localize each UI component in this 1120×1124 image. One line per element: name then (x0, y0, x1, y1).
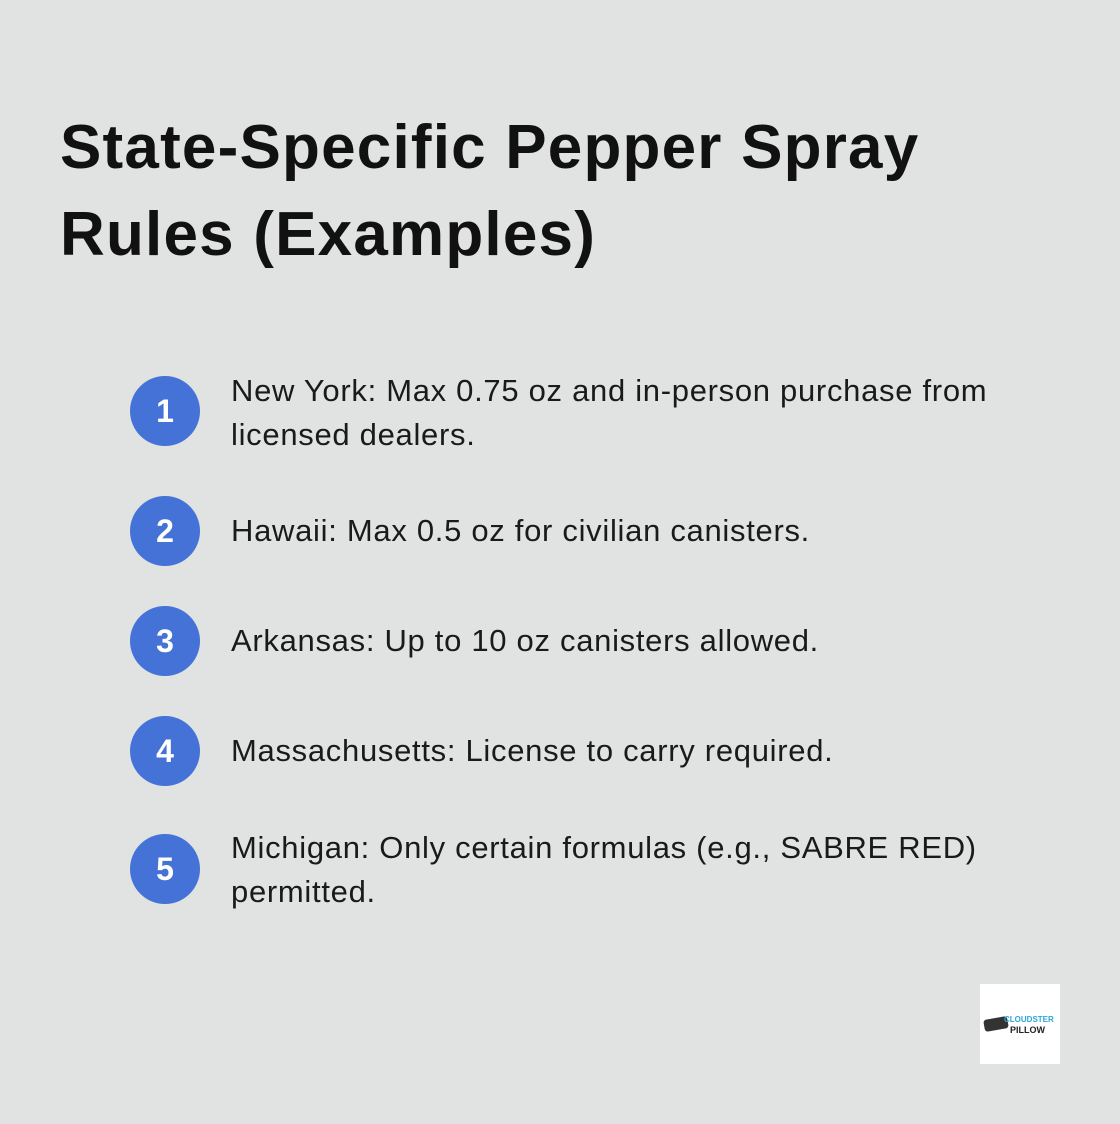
item 1 (130, 373, 987, 452)
text 1: New York: Max 0.75 oz and in-person purchase from (231, 373, 987, 408)
item 5 (130, 830, 977, 909)
badge 1: 1 (156, 393, 174, 429)
text 2: Hawaii: Max 0.5 oz for civilian canisters. (231, 513, 810, 548)
badge 4 (130, 716, 200, 786)
item 3 (130, 606, 819, 676)
title (60, 113, 919, 269)
text 1 (231, 373, 987, 452)
text 4: Massachusetts: License to carry required. (231, 733, 833, 768)
badge 5 (130, 834, 200, 904)
logo: PILLOW (1010, 1025, 1045, 1035)
item 2 (130, 496, 810, 566)
text 3: Arkansas: Up to 10 oz canisters allowed. (231, 623, 819, 658)
badge 4: 4 (156, 733, 174, 769)
title: Rules (Examples) (60, 200, 596, 269)
badge 1 (130, 376, 200, 446)
item 4 (130, 716, 833, 786)
badge 2 (130, 496, 200, 566)
logo (980, 984, 1060, 1064)
badge 5: 5 (156, 851, 174, 887)
text 5 (231, 830, 977, 909)
text 5: Michigan: Only certain formulas (e.g., SABRE RED) (231, 830, 977, 865)
text 1: licensed dealers. (231, 417, 476, 452)
badge 3 (130, 606, 200, 676)
logo: CLOUDSTER (1004, 1015, 1054, 1024)
badge 3: 3 (156, 623, 174, 659)
title: State-Specific Pepper Spray (60, 113, 919, 182)
text 5: permitted. (231, 874, 376, 909)
badge 2: 2 (156, 513, 174, 549)
